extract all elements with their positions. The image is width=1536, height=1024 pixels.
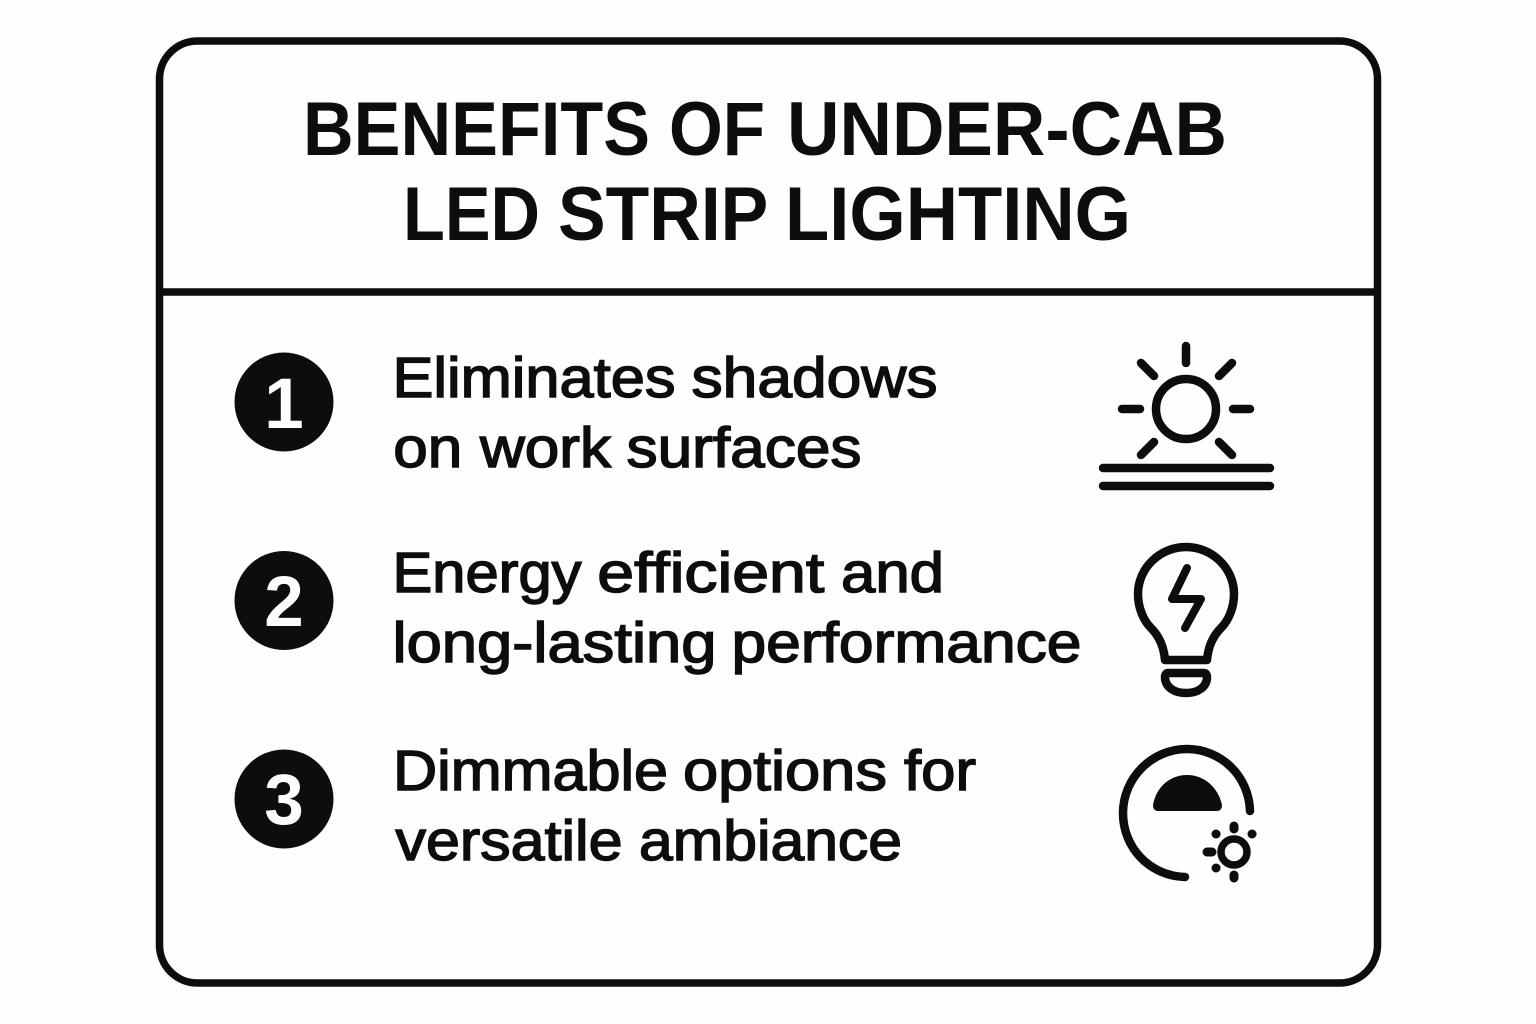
number badge 3: 3 [264,761,304,840]
icon: light bulb with bolt [1138,547,1234,693]
benefit 1 text: Eliminates [392,346,676,410]
benefit 1 text [392,346,938,480]
title: LIGHTING [785,172,1131,257]
benefit 3 [234,739,1252,878]
benefit 1 text: work [479,416,612,480]
icon: dimmer dial with small sun [1123,749,1252,878]
benefit 2 text: and [841,541,944,605]
benefit 2 text: Energy [392,541,582,605]
benefit 2 [234,541,1234,693]
benefit 2 text: long-lasting [392,611,716,675]
benefit 3 text [393,739,976,873]
benefit 3 text: options [683,739,887,803]
number badge 1: 1 [264,365,304,444]
icon: sun over work surface [1103,346,1270,486]
title: OF [669,87,765,172]
benefit 1 text: on [393,416,462,480]
title [303,87,1227,257]
benefit 3 text: versatile [396,809,622,873]
benefit 1 [234,346,1270,486]
benefit 3 text: Dimmable [393,739,668,803]
benefit 3 text: ambiance [639,809,902,873]
number badge 2 [234,551,334,650]
benefit 2 text: performance [732,611,1082,675]
benefit 2 text [392,541,1082,675]
benefit 1 text: surfaces [626,416,862,480]
benefit 2 text: efficient [597,541,824,605]
card panel [160,41,1378,983]
benefit 1 text: shadows [692,346,938,410]
number badge 3 [234,750,334,848]
number badge 1 [234,352,334,452]
title: LED [403,172,540,257]
title: STRIP [558,172,767,257]
number badge 2: 2 [264,563,304,642]
title: BENEFITS [303,87,650,172]
title: UNDER-CAB [787,87,1227,172]
benefit 3 text: for [904,739,976,803]
